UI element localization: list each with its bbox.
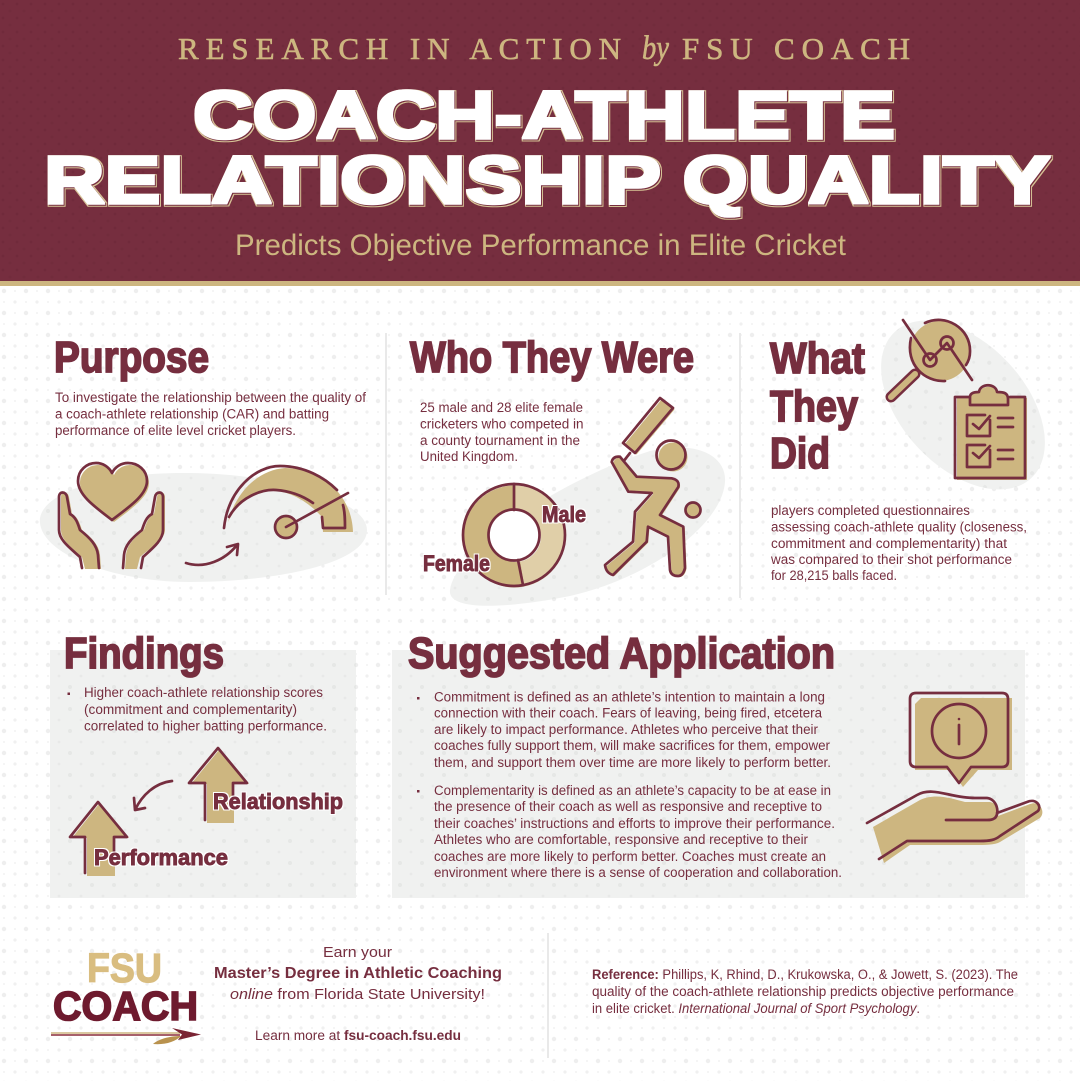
arrow: curved upward — [186, 544, 238, 565]
text block: what they did: players completed questionnaires — [771, 503, 970, 518]
icon: relationship up arrow — [189, 748, 249, 823]
bullet text: complementarity: environment where there is a sense of cooperation and collaboration. — [434, 865, 842, 880]
bullet text: commitment: connection with their coach. Fears of leaving, being fired, etcetera — [434, 706, 823, 720]
heading: what they did: Did — [770, 429, 830, 478]
bullet text: complementarity: Athletes who are comfortable, responsive and receptive to their — [434, 832, 809, 847]
label: performance: Performance — [94, 845, 228, 870]
text block: reference: quality of the coach-athlete relationship predicts objective performance — [592, 984, 1014, 999]
heading: suggested application: Suggested Application — [408, 629, 835, 678]
chart: male and female donut — [463, 484, 565, 587]
logo: FSU Coach — [51, 945, 201, 1044]
heading: what they did — [770, 334, 865, 478]
text block: purpose: To investigate the relationship between the quality of — [55, 390, 366, 405]
panel: what they did — [770, 290, 1077, 583]
heading: findings: Findings — [64, 629, 224, 678]
gray blob behind who they were icons — [450, 447, 725, 606]
gray blob behind purpose icons — [40, 473, 367, 582]
panel: findings — [50, 629, 356, 898]
bullet text: findings: Higher coach-athlete relationship scores — [84, 685, 323, 700]
gray blob behind what they did icons — [849, 290, 1077, 520]
bullet text: commitment: coaches fully support them, will make sacrifices for them, empower — [434, 738, 831, 753]
bullet text: commitment: Commitment is defined as an athlete’s intention to maintain a long — [434, 690, 825, 704]
text block: purpose: performance of elite level cricket players. — [55, 423, 296, 438]
bullet text: complementarity: coaches are more likely to perform better. Coaches must create an — [434, 849, 826, 864]
text block: reference: in elite cricket. International Journal of Sport Psychology. — [592, 1001, 920, 1016]
text block: degree promotion: Learn more at fsu-coach.fsu.edu — [255, 1028, 461, 1043]
icon: cricket batter — [605, 398, 702, 577]
text block: reference: Reference: Phillips, K, Rhind, D., Krukowska, O., & Jowett, S. (2023). The — [592, 967, 1018, 982]
title: RELATIONSHIP QUALITY — [44, 143, 1050, 218]
column dividers — [386, 333, 740, 1058]
text block: degree promotion — [214, 945, 502, 1043]
panel: suggested application — [392, 629, 1042, 898]
kicker: research in action by FSU Coach — [178, 30, 910, 67]
icon: heart in hands — [59, 463, 165, 569]
bullet text: findings: (commitment and complementarity) — [84, 702, 297, 717]
text block: who they were — [420, 400, 584, 464]
text block: what they did: for 28,215 balls faced. — [771, 568, 897, 583]
icon: magnifier with line chart — [891, 320, 972, 397]
icon: clipboard checklist — [955, 385, 1027, 480]
icon: spear arrow — [51, 1028, 201, 1044]
heading: who they were: Who They Were — [410, 333, 694, 382]
text block: who they were: United Kingdom. — [420, 449, 518, 464]
bullet text: findings — [68, 685, 327, 734]
label: female: Female — [423, 551, 490, 576]
findings background — [50, 650, 356, 898]
text block: purpose: a coach-athlete relationship (CAR) and batting — [55, 406, 329, 422]
panel: purpose — [40, 333, 367, 582]
icon: info bubble over hand — [867, 693, 1042, 863]
text block: degree promotion: Earn your — [323, 945, 392, 961]
icon: gauge — [224, 466, 353, 538]
text block: who they were: cricketers who competed in — [420, 416, 584, 432]
text block: degree promotion: Master’s Degree in Athletic Coaching — [214, 965, 502, 982]
bullet text: commitment: them, and support them over time are more likely to perform better. — [434, 755, 831, 770]
suggested application background — [392, 650, 1025, 898]
label: male: Male — [542, 502, 586, 527]
text block: who they were: 25 male and 28 elite female — [420, 400, 583, 415]
bullet text: complementarity: Complementarity is defined as an athlete’s capacity to be at ease in — [434, 783, 831, 798]
kicker: research in action by FSU Coach: RESEARCH IN ACTION — [178, 31, 621, 66]
text block: what they did: commitment and complementarity) that — [771, 536, 1007, 551]
bullet text: complementarity — [417, 783, 842, 880]
text block: what they did: was compared to their shot performance — [770, 552, 1012, 567]
text block: purpose — [55, 390, 366, 438]
icon: performance up arrow — [70, 802, 129, 876]
heading: purpose: Purpose — [54, 333, 209, 382]
arrow: relationship to performance — [134, 781, 172, 810]
header banner — [0, 0, 1080, 286]
kicker: research in action by FSU Coach: by — [642, 30, 670, 67]
heading: what they did: What — [770, 334, 865, 383]
bullet text: findings: correlated to higher batting performance. — [84, 718, 327, 734]
text block: who they were: a county tournament in the — [420, 433, 580, 448]
text block: reference — [592, 967, 1018, 1016]
label: relationship: Relationship — [213, 789, 343, 814]
text block: what they did: assessing coach-athlete quality (closeness, — [771, 520, 1027, 534]
bullet text: commitment — [417, 690, 831, 770]
subtitle: Predicts Objective Performance in Elite Cricket — [235, 229, 847, 262]
bullet text: complementarity: their coaches’ instructions and efforts to improve their performance. — [434, 816, 835, 831]
text block: what they did — [770, 503, 1027, 583]
heading: what they did: They — [770, 382, 858, 431]
text block: degree promotion: online from Florida State University! — [230, 987, 485, 1003]
title — [44, 78, 1050, 218]
panel: who they were — [410, 333, 725, 606]
kicker: research in action by FSU Coach: FSU COACH — [682, 31, 910, 66]
title: COACH-ATHLETE — [193, 78, 895, 153]
logo word: COACH: COACH — [53, 983, 198, 1029]
bullet text: complementarity: the presence of their coach as well as responsive and receptive to — [434, 799, 822, 814]
logo word: FSU: FSU — [87, 945, 162, 991]
bullet text: commitment: are likely to impact performance. Athletes who perceive that their — [434, 722, 819, 737]
